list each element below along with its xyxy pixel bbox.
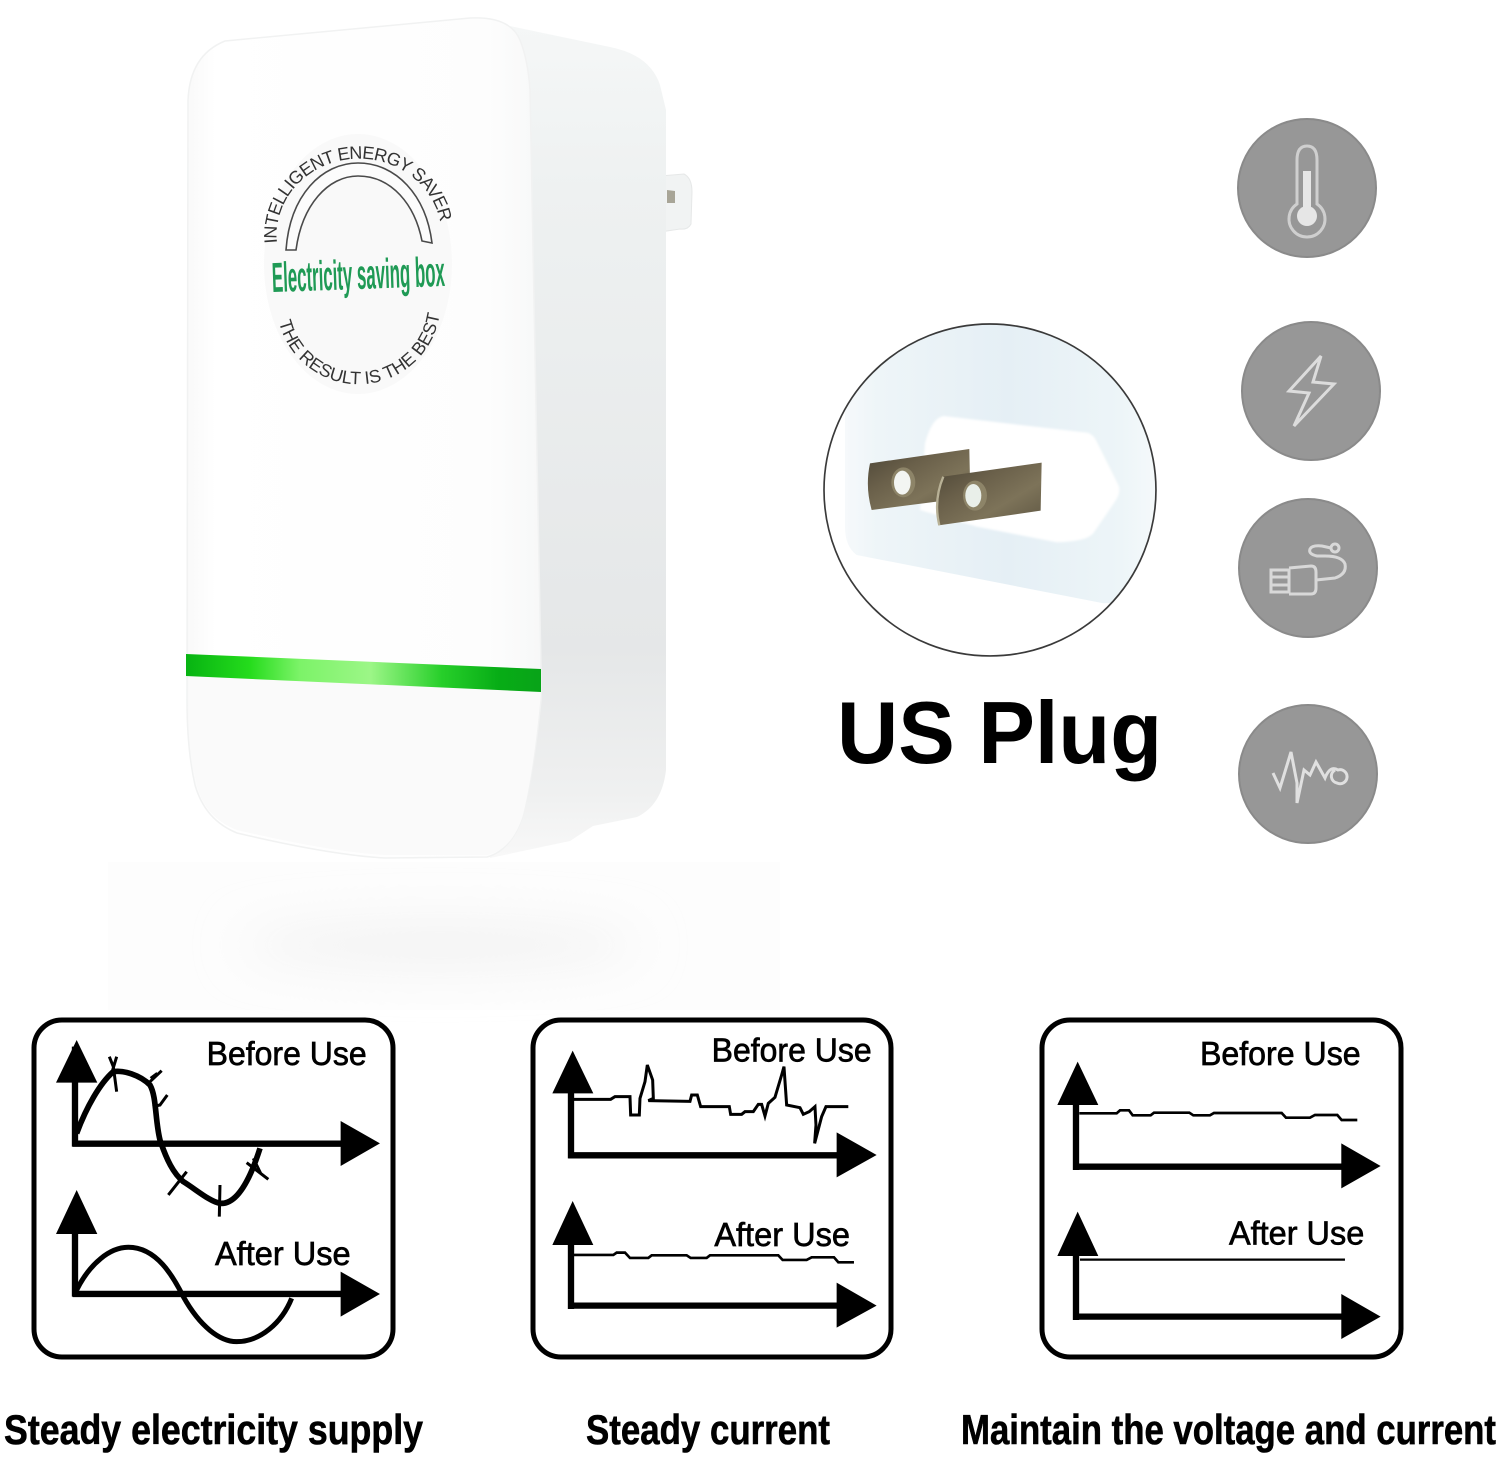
lower front shading: [190, 676, 541, 855]
before-use chart: [552, 1033, 877, 1177]
heading: US Plug: US Plug: [837, 683, 1162, 782]
floor shadow under device: [108, 862, 780, 1010]
badge: [264, 146, 451, 384]
green light band: [186, 654, 541, 692]
panel: maintain the voltage and current: [1042, 1020, 1401, 1357]
prong hole mark: [667, 190, 675, 203]
before-use chart: Before Use: [712, 1033, 872, 1070]
badge disc: [264, 134, 452, 394]
plug head: [920, 416, 1119, 542]
before-use chart: [1057, 1036, 1381, 1188]
before-use chart: Before Use: [207, 1036, 367, 1073]
caption: steady electricity supply: Steady electricity supply: [4, 1406, 424, 1453]
plug close-up circle: [824, 310, 1170, 656]
plug prong on the side: [660, 174, 692, 232]
before-use chart: [56, 1036, 380, 1217]
curved text: top: INTELLIGENT ENERGY SAVER: [264, 146, 451, 242]
after-use chart: [552, 1201, 877, 1328]
icon: waveform: [1239, 705, 1377, 843]
device side housing: [490, 24, 666, 858]
after-use chart: [1057, 1212, 1381, 1339]
icon: lightning bolt: [1242, 322, 1380, 460]
arch graphic: [286, 163, 432, 250]
after-use chart: [56, 1190, 380, 1342]
circle outline: [824, 324, 1156, 656]
device: energy saver plug: [186, 17, 692, 858]
icon: usb cable: [1239, 499, 1377, 637]
front prong: [937, 463, 1042, 525]
rear prong: [868, 449, 970, 510]
before-use chart: Before Use: [1200, 1036, 1361, 1073]
housing background: [845, 310, 1170, 603]
after-use chart: After Use: [1229, 1215, 1364, 1252]
device: energy saver plug: Electricity saving box: [271, 248, 446, 301]
after-use chart: After Use: [714, 1217, 850, 1254]
panel: steady electricity supply: [34, 1020, 393, 1357]
icon: thermometer: [1238, 119, 1376, 257]
after-use chart: After Use: [215, 1236, 351, 1273]
caption: steady current: Steady current: [586, 1406, 830, 1453]
panel: steady current: [533, 1020, 891, 1357]
curved text: bottom: THE RESULT IS THE BEST: [280, 312, 439, 384]
device front face: [187, 18, 541, 858]
